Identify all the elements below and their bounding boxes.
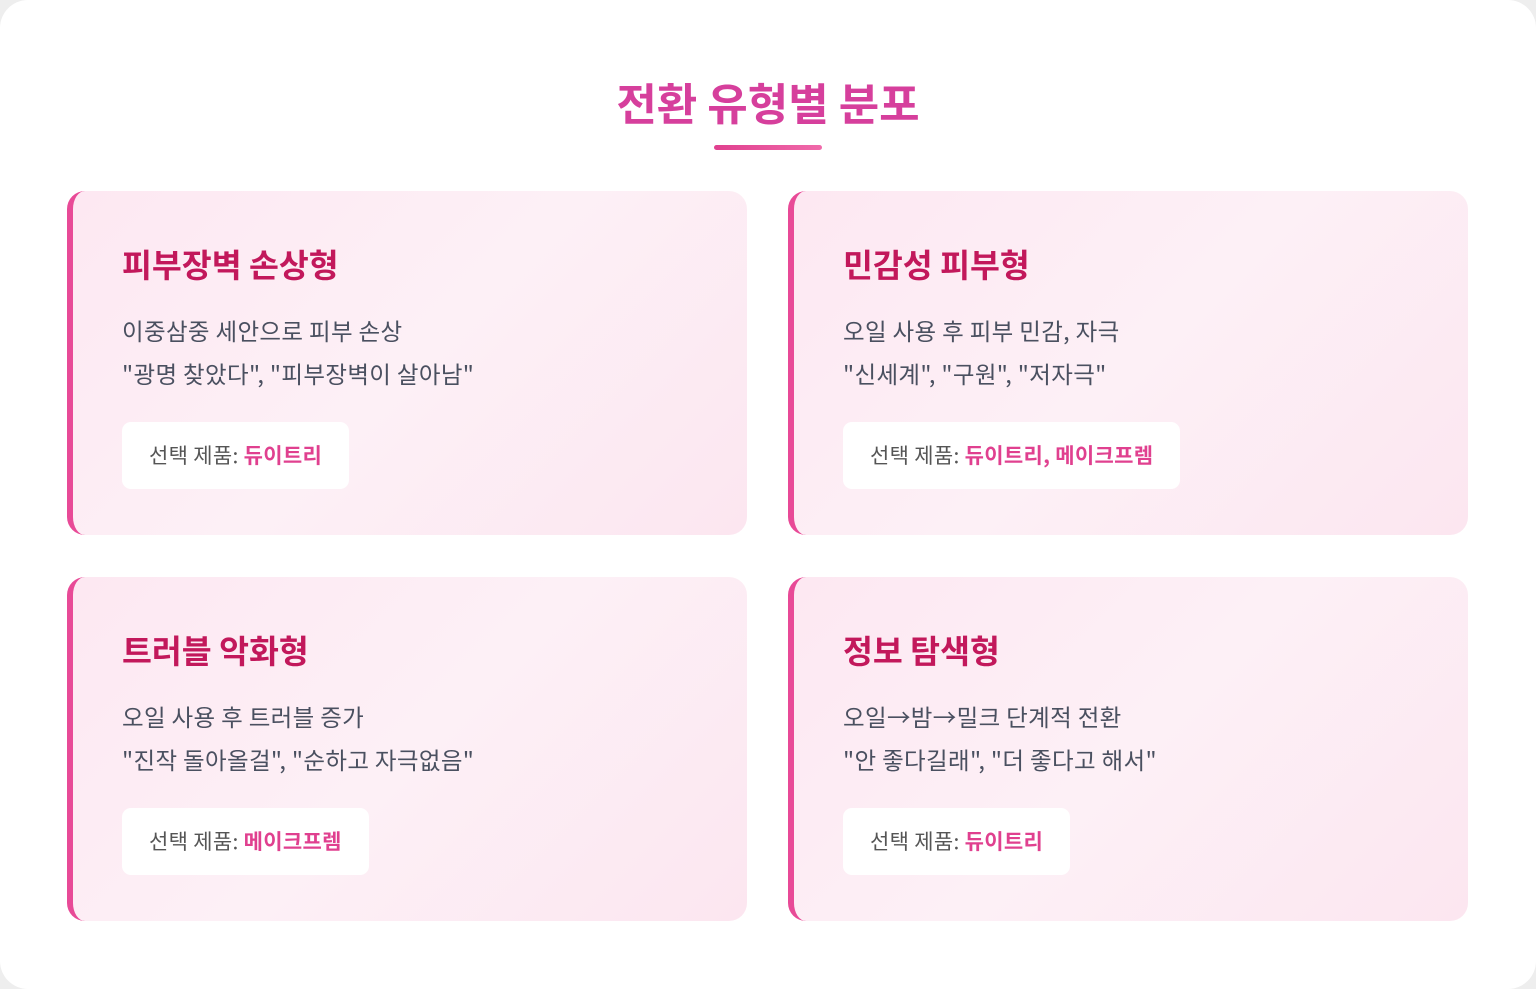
title: 전환 유형별 분포	[616, 69, 920, 133]
badge: selected product: 선택 제품: 듀이트리, 메이크프렘	[870, 440, 1153, 470]
heading: 피부장벽 손상형	[122, 240, 339, 287]
description	[843, 313, 1120, 390]
badge: selected product	[843, 422, 1180, 489]
badge: selected product: 선택 제품: 듀이트리	[870, 826, 1043, 856]
description: "안 좋다길래", "더 좋다고 해서"	[843, 742, 1157, 776]
badge: selected product	[122, 808, 369, 875]
description	[122, 313, 474, 390]
badge: selected product: 선택 제품: 듀이트리	[149, 440, 322, 470]
panel: 민감성 피부형	[788, 191, 1468, 535]
description: "광명 찾았다", "피부장벽이 살아남"	[122, 356, 474, 390]
heading: 트러블 악화형	[122, 626, 309, 673]
badge: selected product	[122, 422, 349, 489]
description: 이중삼중 세안으로 피부 손상	[122, 313, 402, 347]
heading: 정보 탐색형	[843, 626, 1000, 673]
description	[122, 699, 474, 776]
description: "신세계", "구원", "저자극"	[843, 356, 1107, 390]
description	[843, 699, 1157, 776]
description: "진작 돌아올걸", "순하고 자극없음"	[122, 742, 474, 776]
panel: 트러블 악화형	[67, 577, 747, 921]
panel: 정보 탐색형	[788, 577, 1468, 921]
title underline	[714, 145, 822, 150]
heading: 민감성 피부형	[843, 240, 1030, 287]
description: 오일→밤→밀크 단계적 전환	[843, 699, 1122, 733]
description: 오일 사용 후 트러블 증가	[122, 699, 364, 733]
badge: selected product	[843, 808, 1070, 875]
panel: 피부장벽 손상형	[67, 191, 747, 535]
badge: selected product: 선택 제품: 메이크프렘	[149, 826, 342, 856]
description: 오일 사용 후 피부 민감, 자극	[843, 313, 1120, 347]
